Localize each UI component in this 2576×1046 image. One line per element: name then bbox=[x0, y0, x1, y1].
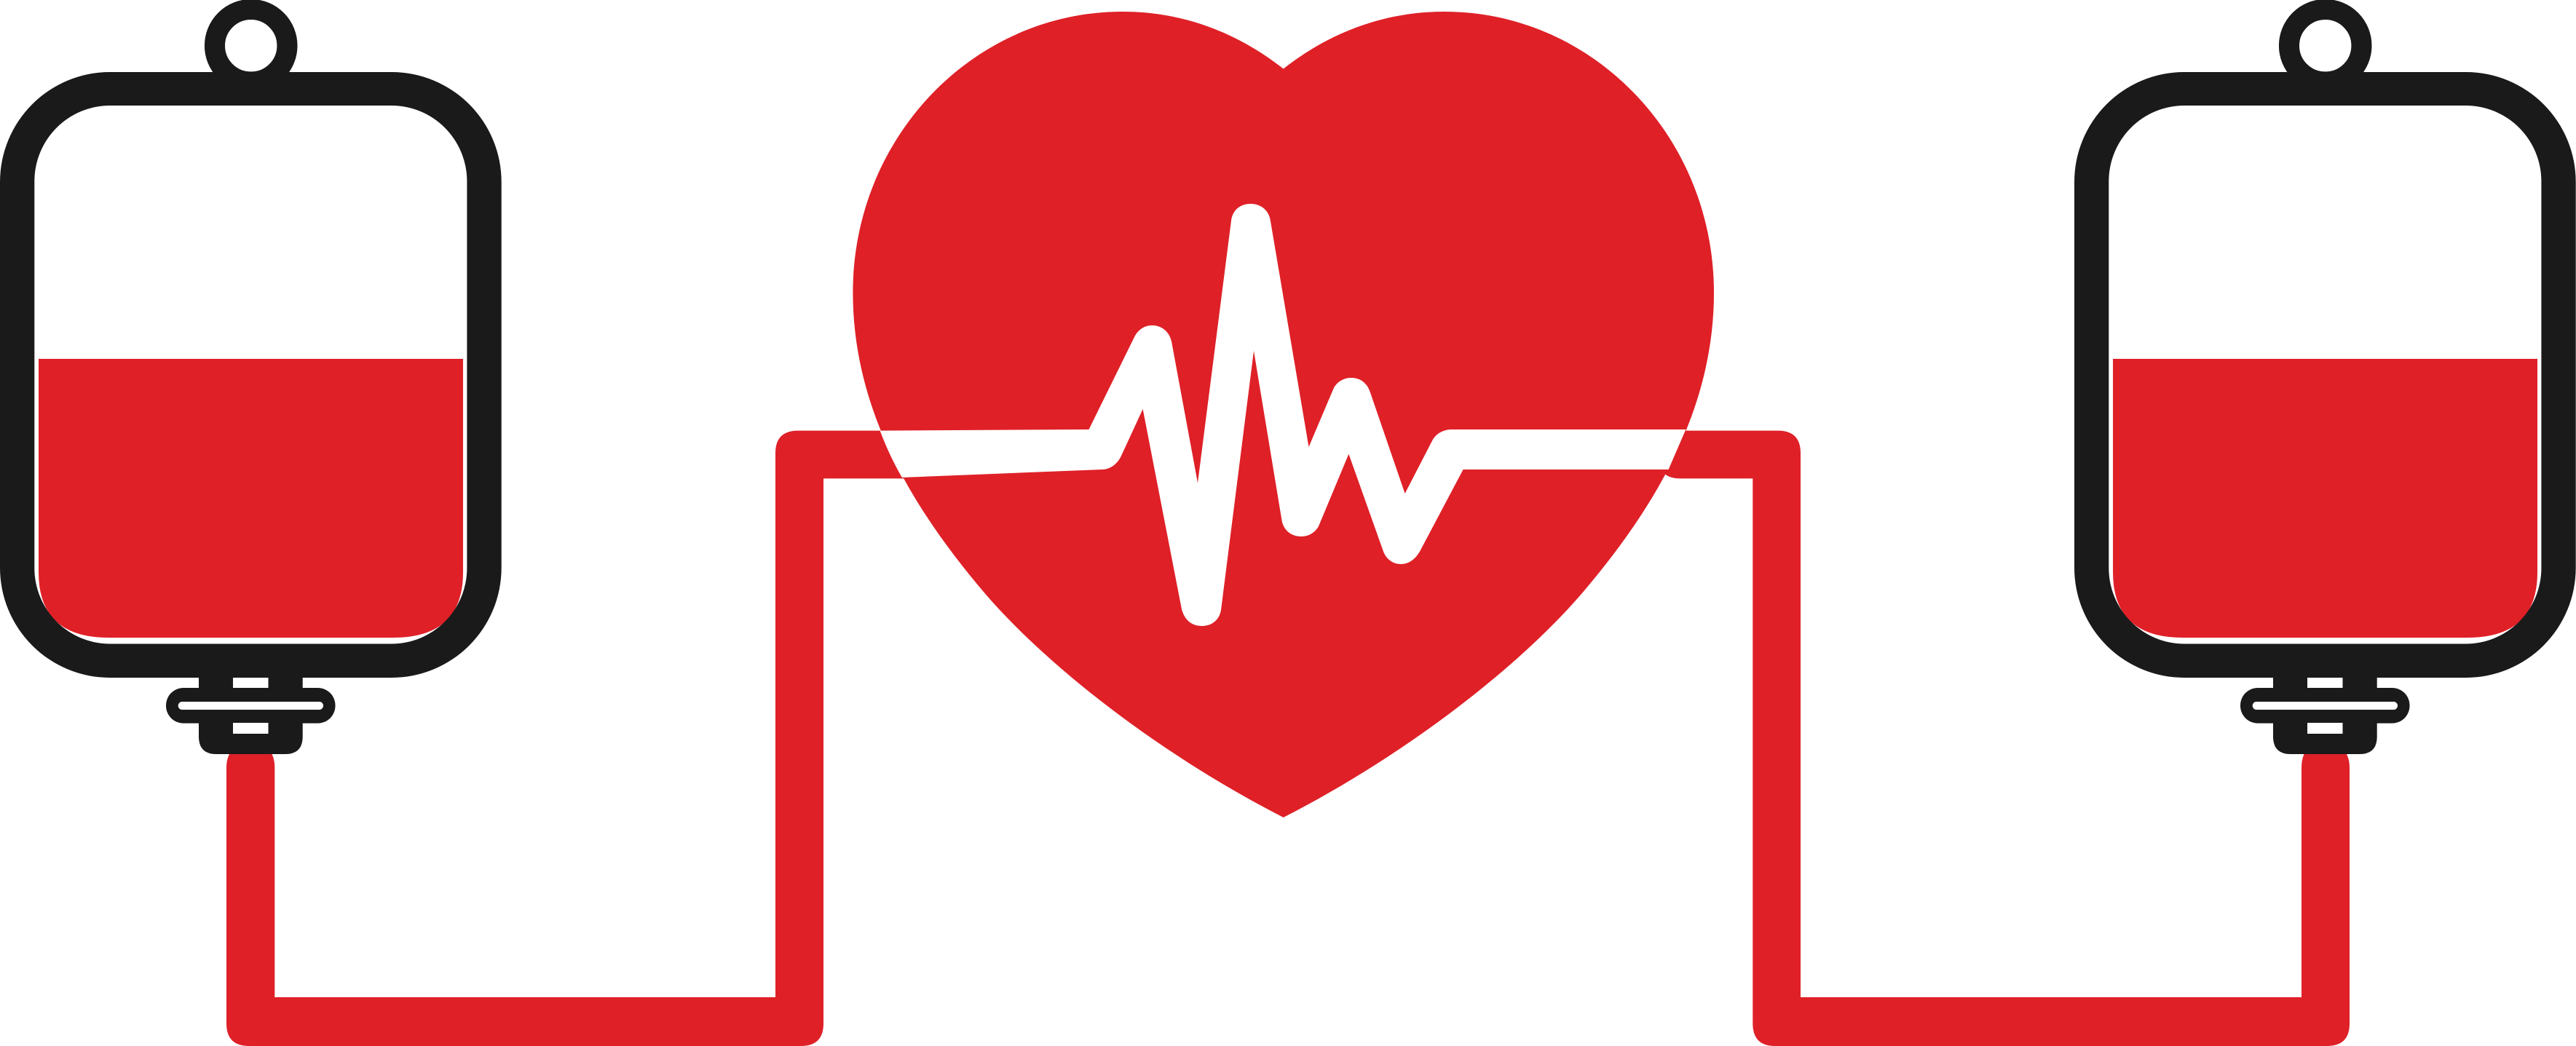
port connector: right bbox=[2273, 673, 2377, 754]
clamp slit: right bbox=[2253, 702, 2398, 710]
left blood bag bbox=[0, 9, 502, 754]
blood fill: left bag bbox=[39, 359, 463, 638]
lower port window: left bbox=[233, 723, 268, 734]
tube: left bag to heart bbox=[226, 431, 906, 1046]
clamp: left bbox=[166, 688, 335, 724]
tube: right bag to heart bbox=[1665, 431, 2350, 1046]
blood fill: right bag bbox=[2113, 359, 2537, 638]
upper port window: right bbox=[2307, 678, 2343, 688]
clamp slit: left bbox=[178, 702, 323, 710]
hanger ring: left bbox=[215, 9, 287, 82]
port connector: left bbox=[199, 673, 303, 754]
hanger ring: right bbox=[2289, 9, 2361, 82]
heart bbox=[853, 12, 1714, 817]
bag outline: left bbox=[0, 72, 502, 678]
upper port window: left bbox=[233, 678, 268, 688]
lower port window: right bbox=[2307, 723, 2343, 734]
right blood bag bbox=[2074, 9, 2576, 754]
heartbeat line bbox=[880, 204, 1686, 626]
bag outline: right bbox=[2074, 72, 2576, 678]
clamp: right bbox=[2240, 688, 2410, 724]
